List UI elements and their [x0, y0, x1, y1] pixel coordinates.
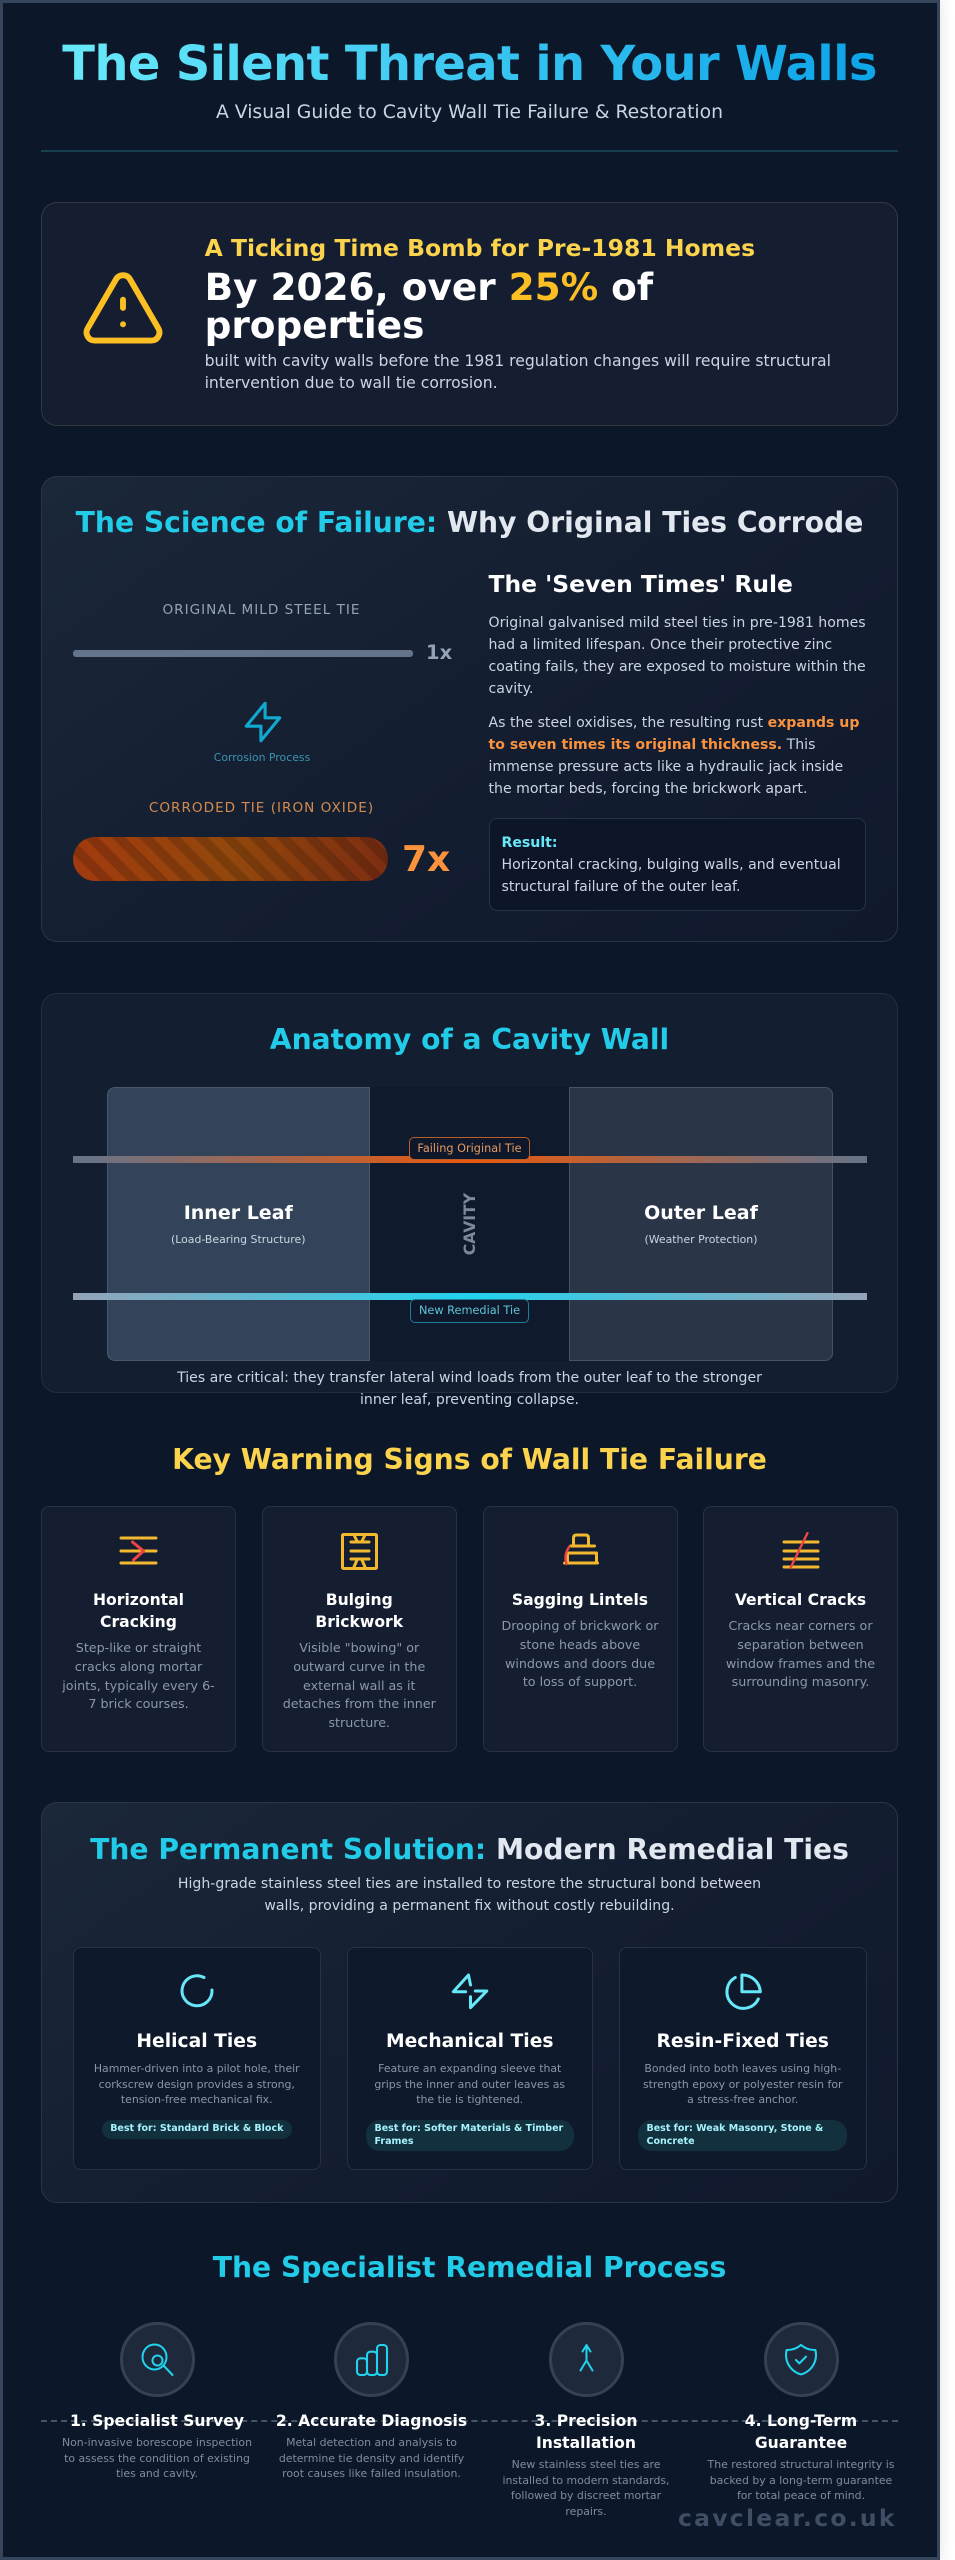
card: horizontal cracking — [41, 1506, 236, 1752]
heading: The Permanent Solution: Modern Remedial Ties — [90, 1833, 849, 1866]
intro text: walls, providing a permanent fix without costly rebuilding. — [264, 1898, 675, 1914]
icon: mechanical — [452, 1974, 488, 2010]
watermark: cavclear.co.uk — [678, 2504, 897, 2532]
inner leaf: (Load-Bearing Structure) — [171, 1233, 305, 1246]
1x label: 1x — [426, 641, 452, 664]
panel: permanent solution — [41, 1802, 898, 2203]
card: mechanical ties: the tie is tightened. — [416, 2093, 523, 2106]
cavity: CAVITY — [460, 1193, 478, 1255]
7x label: 7x — [402, 839, 450, 880]
inner leaf — [106, 1087, 370, 1361]
step 1: Non-invasive borescope inspection — [62, 2436, 252, 2449]
original tie bar — [72, 650, 413, 657]
card: sagging lintels — [482, 1506, 678, 1752]
step 2: Metal detection and analysis to — [286, 2436, 457, 2449]
step 2: root causes like failed insulation. — [282, 2467, 461, 2480]
intro text — [178, 1876, 761, 1914]
step 3: 3. Precision — [535, 2412, 637, 2430]
new remedial tie — [72, 1293, 867, 1300]
card: vertical cracks: Vertical Cracks — [735, 1591, 866, 1609]
icon: bulging brickwork — [341, 1533, 378, 1570]
corroded tie label: CORRODED TIE (IRON OXIDE) — [149, 800, 374, 816]
paragraph 1: Original galvanised mild steel ties in pre-1981 homes — [488, 615, 866, 631]
card: mechanical ties — [346, 1947, 593, 2170]
paragraph 2: As the steel oxidises, the resulting rust expands up — [488, 715, 859, 731]
icon: helical — [180, 1974, 214, 2008]
original tie label: ORIGINAL MILD STEEL TIE — [162, 602, 361, 618]
seven times heading: The 'Seven Times' Rule — [488, 570, 793, 598]
panel: ticking time bomb alert — [41, 202, 898, 426]
step 2 — [276, 2322, 467, 2480]
card: horizontal cracking: Step-like or straight — [76, 1640, 201, 1655]
cavity — [370, 1087, 569, 1361]
card: mechanical ties: Frames — [374, 2136, 413, 2147]
label: new remedial tie — [410, 1299, 529, 1323]
paragraph 1: coating fails, they are exposed to moisture within the — [488, 659, 866, 675]
step 3: installed to modern standards, — [502, 2474, 670, 2487]
step 1: to assess the condition of existing — [64, 2452, 250, 2465]
card: resin-fixed ties: a stress-free anchor. — [687, 2093, 798, 2106]
icon: bar chart — [334, 2322, 409, 2397]
step 4 — [708, 2322, 894, 2502]
panel: anatomy of a cavity wall — [41, 993, 898, 1393]
card: helical ties: Hammer-driven into a pilot hole, their — [94, 2062, 300, 2075]
alert body: intervention due to wall tie corrosion. — [205, 373, 498, 392]
card: sagging lintels: Drooping of brickwork or — [501, 1618, 659, 1633]
icon: shield check — [764, 2322, 838, 2397]
step 4: The restored structural integrity is — [708, 2458, 894, 2471]
caption — [177, 1370, 762, 1408]
inner leaf: Inner Leaf — [184, 1202, 293, 1224]
step 4: for total peace of mind. — [737, 2489, 865, 2502]
card: horizontal cracking: Horizontal — [93, 1591, 184, 1609]
step 3: followed by discreet mortar — [511, 2489, 661, 2502]
alert headline: By 2026, over 25% of — [205, 265, 653, 309]
outer leaf — [569, 1087, 833, 1361]
card: horizontal cracking: 7 brick courses. — [88, 1696, 189, 1711]
paragraph 2: immense pressure acts like a hydraulic jack inside — [488, 759, 843, 775]
alert body — [205, 351, 831, 392]
label: failing original tie — [409, 1137, 530, 1160]
step 4: Guarantee — [755, 2434, 847, 2452]
corroded tie bar — [73, 837, 388, 881]
card: bulging brickwork: external wall as it — [303, 1678, 415, 1693]
step 3: repairs. — [565, 2505, 607, 2518]
card: horizontal cracking: cracks along mortar — [75, 1659, 202, 1674]
step 2: determine tie density and identify — [279, 2452, 464, 2465]
card: bulging brickwork: Visible "bowing" or — [299, 1640, 419, 1655]
step 2: 2. Accurate Diagnosis — [276, 2412, 467, 2430]
card: vertical cracks: Cracks near corners or — [728, 1618, 873, 1633]
card: vertical cracks: separation between — [737, 1637, 864, 1652]
card: bulging brickwork: structure. — [328, 1715, 390, 1730]
icon: magnifier — [120, 2322, 194, 2397]
title: The Silent Threat in Your Walls — [62, 36, 877, 92]
heading: Anatomy of a Cavity Wall — [270, 1023, 669, 1056]
card: vertical cracks — [703, 1506, 898, 1752]
card: sagging lintels: windows and doors due — [505, 1656, 655, 1671]
panel: science of failure — [41, 476, 898, 942]
card: resin-fixed ties: Bonded into both leaves using high- — [644, 2062, 841, 2075]
result callout — [488, 818, 866, 911]
label: new remedial tie: New Remedial Tie — [419, 1304, 520, 1317]
card: mechanical ties: grips the inner and outer leaves as — [374, 2078, 565, 2091]
card: resin-fixed ties: Concrete — [646, 2136, 695, 2147]
icon: resin — [725, 1974, 762, 2010]
paragraph 2 — [488, 715, 859, 797]
card: helical ties: Best for: Standard Brick & Block — [110, 2123, 283, 2134]
step 1: 1. Specialist Survey — [70, 2412, 244, 2430]
card: resin-fixed ties — [619, 1947, 866, 2170]
outer leaf: (Weather Protection) — [645, 1233, 757, 1246]
card: vertical cracks: window frames and the — [726, 1656, 875, 1671]
card: helical ties — [73, 1947, 320, 2170]
card: helical ties: Helical Ties — [136, 2031, 257, 2052]
result callout: Result: — [502, 834, 558, 850]
label: failing original tie: Failing Original Tie — [417, 1142, 522, 1155]
card: bulging brickwork: Bulging — [326, 1591, 393, 1609]
card: resin-fixed ties: strength epoxy or polyester resin for — [643, 2078, 843, 2091]
step 3 — [502, 2322, 670, 2518]
card: vertical cracks: surrounding masonry. — [732, 1674, 869, 1689]
card: mechanical ties: Feature an expanding sleeve that — [378, 2062, 561, 2075]
step 4: 4. Long-Term — [745, 2412, 857, 2430]
card: bulging brickwork: detaches from the inner — [283, 1696, 436, 1711]
heading: The Science of Failure: Why Original Ties Corrode — [76, 506, 863, 539]
icon: warning triangle — [84, 272, 162, 344]
alert headline: properties — [205, 303, 424, 347]
step 3: Installation — [536, 2434, 636, 2452]
alert body: built with cavity walls before the 1981 regulation changes will require structural — [205, 351, 831, 370]
icon: corrosion bolt — [244, 702, 282, 742]
result callout: structural failure of the outer leaf. — [502, 878, 740, 894]
card: sagging lintels: to loss of support. — [523, 1674, 637, 1689]
card: sagging lintels: Sagging Lintels — [512, 1591, 648, 1609]
step 4: backed by a long-term guarantee — [710, 2474, 892, 2487]
card: sagging lintels: stone heads above — [520, 1637, 640, 1652]
failing original tie — [72, 1156, 867, 1163]
icon: sagging lintels — [563, 1534, 599, 1566]
step 1: ties and cavity. — [116, 2467, 198, 2480]
paragraph 1: cavity. — [488, 681, 533, 697]
heading: remedial process: The Specialist Remedial Process — [213, 2251, 726, 2284]
outer leaf: Outer Leaf — [644, 1202, 758, 1224]
card: bulging brickwork: Brickwork — [315, 1612, 403, 1630]
icon: tie arrow — [548, 2322, 624, 2397]
card: resin-fixed ties: Resin-Fixed Ties — [657, 2031, 829, 2052]
alert kicker: A Ticking Time Bomb for Pre-1981 Homes — [205, 234, 755, 262]
card: bulging brickwork: outward curve in the — [293, 1659, 425, 1674]
corrosion process label: Corrosion Process — [214, 751, 310, 764]
paragraph 2: the mortar beds, forcing the brickwork apart. — [488, 781, 807, 797]
card: horizontal cracking: Cracking — [100, 1612, 177, 1630]
intro text: High-grade stainless steel ties are installed to restore the structural bond between — [178, 1876, 761, 1892]
step 1 — [62, 2322, 252, 2480]
alert headline — [205, 265, 654, 347]
card: helical ties: corkscrew design provides a strong, — [99, 2078, 295, 2091]
paragraph 1: had a limited lifespan. Once their protective zinc — [488, 637, 832, 653]
icon: horizontal cracking — [120, 1536, 158, 1564]
icon: vertical cracks — [782, 1532, 820, 1570]
card: bulging brickwork — [262, 1506, 456, 1752]
step 3: New stainless steel ties are — [512, 2458, 660, 2471]
card: horizontal cracking: joints, typically every 6- — [62, 1678, 215, 1693]
paragraph 2: to seven times its original thickness. This — [488, 737, 815, 753]
caption: inner leaf, preventing collapse. — [360, 1392, 579, 1408]
card: mechanical ties: Best for: Softer Materials & Timber — [374, 2123, 563, 2134]
card: mechanical ties: Mechanical Ties — [386, 2031, 554, 2052]
card: resin-fixed ties: Best for: Weak Masonry, Stone & — [646, 2123, 823, 2134]
caption: Ties are critical: they transfer lateral wind loads from the outer leaf to the stronger — [177, 1370, 762, 1386]
paragraph 1 — [488, 615, 866, 697]
subtitle: A Visual Guide to Cavity Wall Tie Failure & Restoration — [216, 102, 723, 123]
card: helical ties: tension-free mechanical fix. — [121, 2093, 273, 2106]
result callout: Horizontal cracking, bulging walls, and eventual — [502, 856, 841, 872]
heading: warning signs: Key Warning Signs of Wall Tie Failure — [172, 1443, 767, 1476]
